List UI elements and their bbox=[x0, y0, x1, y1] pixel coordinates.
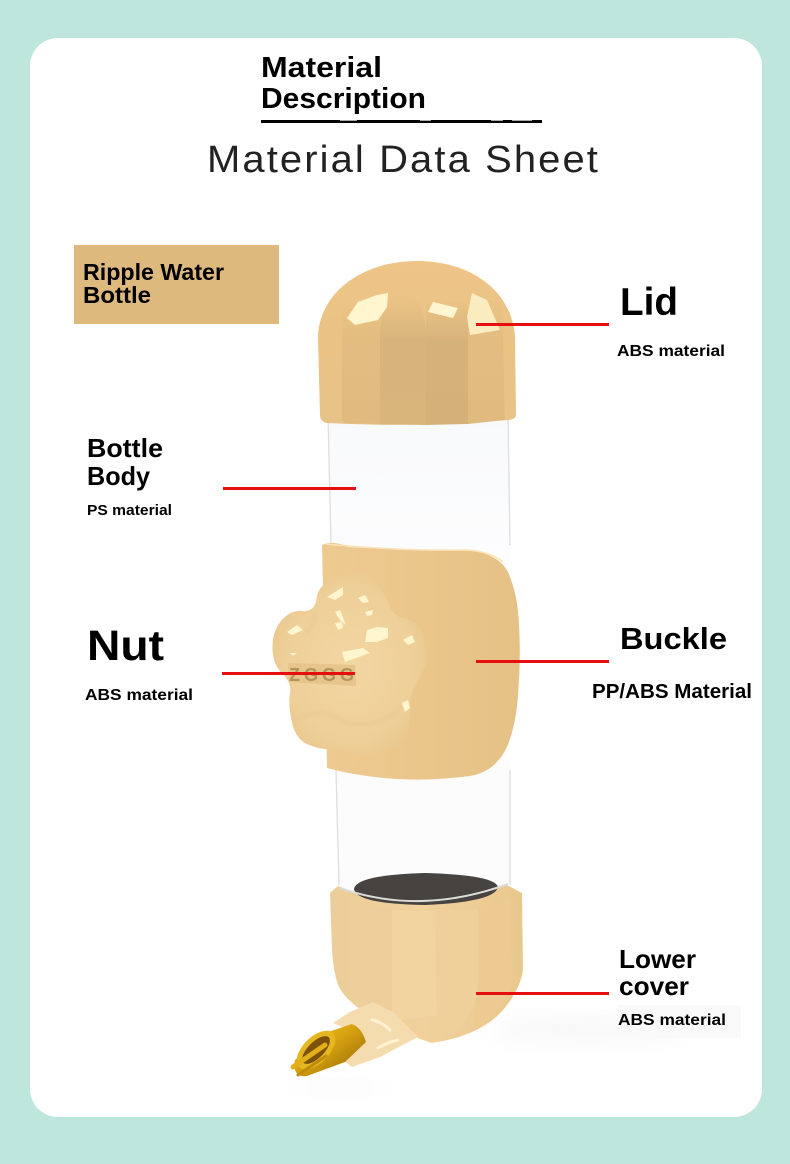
leader line: lid bbox=[476, 323, 609, 326]
title: Material Description: Material bbox=[261, 52, 382, 84]
label: Buckle: Buckle bbox=[620, 621, 727, 656]
transparent tube bbox=[328, 415, 510, 905]
label: Lower cover bbox=[617, 944, 741, 1038]
gold nozzle bbox=[290, 1024, 366, 1076]
nut lobe creases bbox=[296, 612, 402, 724]
label: Lower cover: ABS material bbox=[618, 1012, 726, 1029]
label box: Ripple Water Bottle: Bottle bbox=[83, 282, 151, 308]
label box: Ripple Water Bottle: Ripple Water bbox=[83, 259, 224, 285]
label: Nut bbox=[85, 622, 193, 704]
label: Buckle: PP/ABS Material bbox=[592, 681, 752, 703]
lid bbox=[318, 261, 516, 425]
spout collar bbox=[333, 1002, 418, 1067]
lid highlights bbox=[347, 293, 500, 335]
leader line: bottle body bbox=[223, 487, 356, 490]
label: Lid: ABS material bbox=[617, 343, 725, 360]
label box: Ripple Water Bottle bbox=[74, 245, 279, 324]
label: Lower cover: cover bbox=[619, 971, 689, 1001]
nut plate bbox=[288, 663, 356, 686]
lower cover bbox=[330, 873, 523, 1043]
buckle bbox=[322, 543, 520, 780]
nut lettering: ZGGG bbox=[289, 665, 354, 685]
label: Lower cover: Lower bbox=[619, 944, 696, 974]
title: Material Description bbox=[261, 52, 542, 123]
label: Nut: Nut bbox=[87, 622, 164, 670]
bottle illustration bbox=[272, 261, 690, 1092]
label: Bottle Body: PS material bbox=[87, 502, 172, 519]
dark water reservoir bbox=[354, 873, 498, 905]
subtitle: Material Data Sheet: Material Data Sheet bbox=[207, 139, 600, 181]
label: Lid: Lid bbox=[620, 281, 678, 324]
label: Buckle bbox=[592, 621, 752, 703]
nut bbox=[272, 573, 427, 756]
label: Bottle Body: Bottle bbox=[87, 433, 163, 463]
label: Nut: ABS material bbox=[85, 687, 193, 704]
nut highlights bbox=[287, 587, 415, 712]
label: Lid bbox=[617, 281, 725, 360]
label: Bottle Body bbox=[87, 433, 172, 519]
leader line: buckle bbox=[476, 660, 609, 663]
floor shadow bbox=[290, 1022, 690, 1092]
leader line: lower cover bbox=[476, 992, 609, 995]
label: Bottle Body: Body bbox=[87, 461, 151, 491]
title: Material Description: Description bbox=[261, 83, 426, 115]
leader line: nut bbox=[222, 672, 355, 675]
